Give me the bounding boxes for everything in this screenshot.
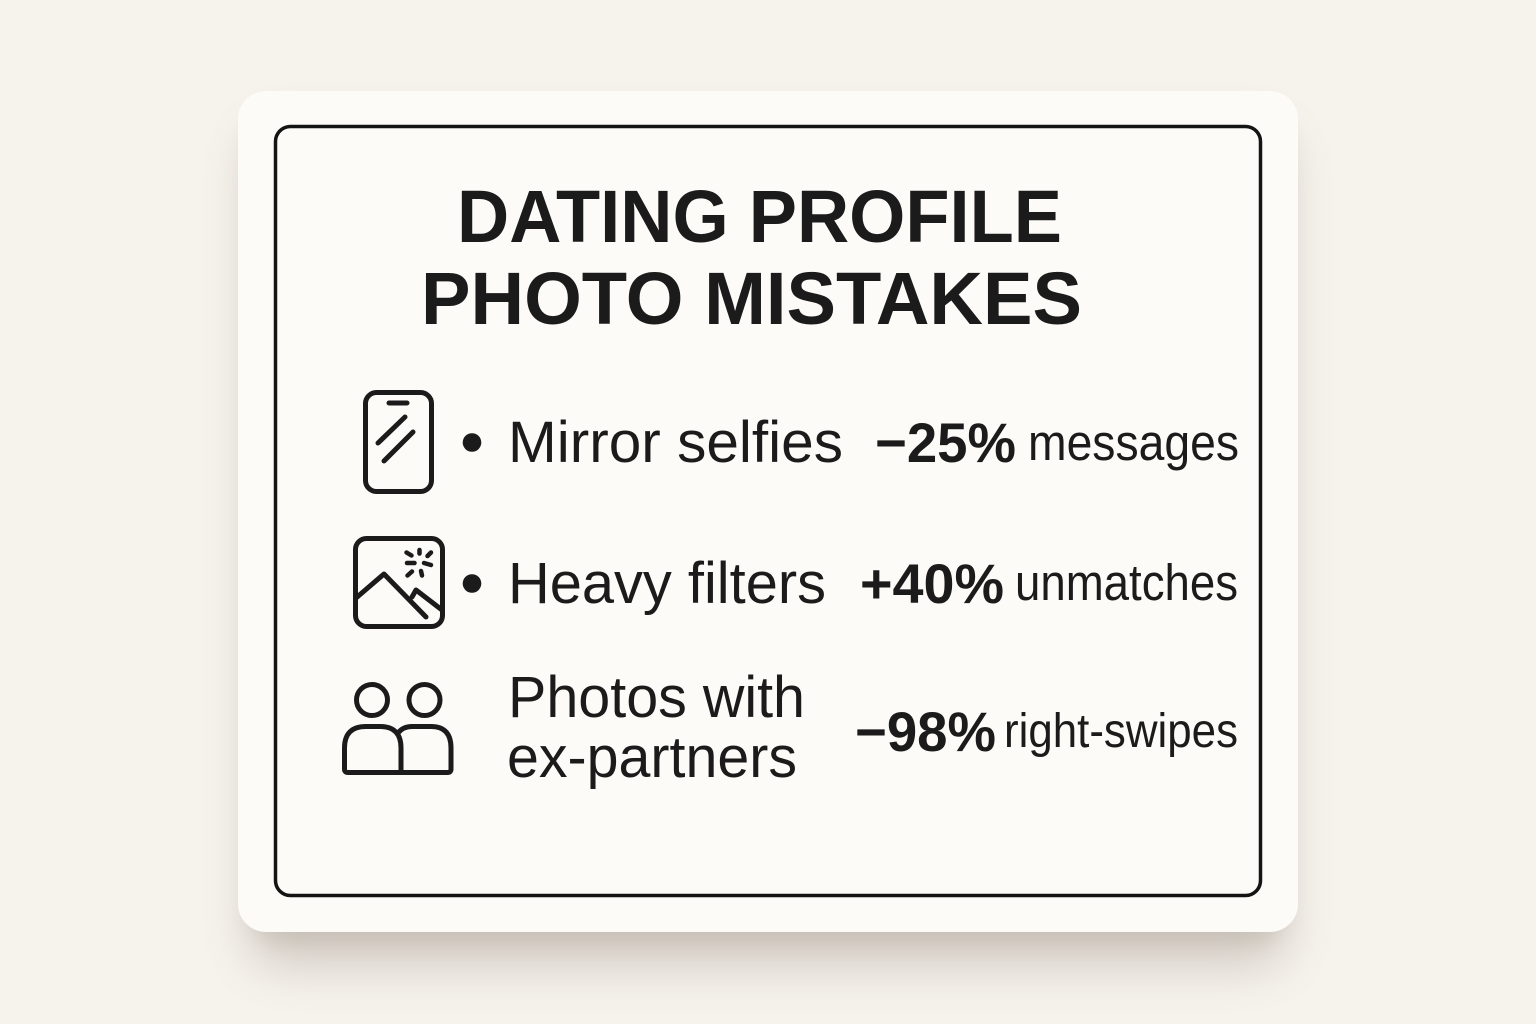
stat: minus 98 percent: −98% (855, 700, 996, 763)
label: photos with ex-partners: ex-partners (507, 725, 797, 790)
icon: two people (344, 684, 451, 772)
title: PHOTO MISTAKES (421, 257, 1082, 340)
label: photos with ex-partners (507, 665, 805, 790)
stat: plus 40 percent: +40% (860, 552, 1004, 615)
stat label: right-swipes: right-swipes (1004, 705, 1238, 758)
title (421, 175, 1082, 340)
stat label: unmatches: unmatches (1015, 554, 1238, 611)
label: mirror selfies: Mirror selfies (508, 410, 843, 475)
icon: phone (366, 392, 432, 492)
row: heavy filters (356, 538, 1238, 626)
row: mirror selfies (366, 392, 1239, 492)
bullet (463, 574, 481, 593)
title: DATING PROFILE (457, 175, 1062, 258)
stat: minus 25 percent: −25% (875, 411, 1016, 474)
bullet (463, 433, 481, 452)
panel: card (238, 91, 1298, 932)
stat label: messages: messages (1028, 414, 1239, 471)
row: photos with ex-partners (344, 665, 1238, 790)
card shadow (250, 110, 1286, 965)
label: heavy filters: Heavy filters (508, 551, 826, 616)
label: photos with ex-partners: Photos with (508, 665, 805, 730)
icon: picture with sparkle (356, 538, 442, 626)
